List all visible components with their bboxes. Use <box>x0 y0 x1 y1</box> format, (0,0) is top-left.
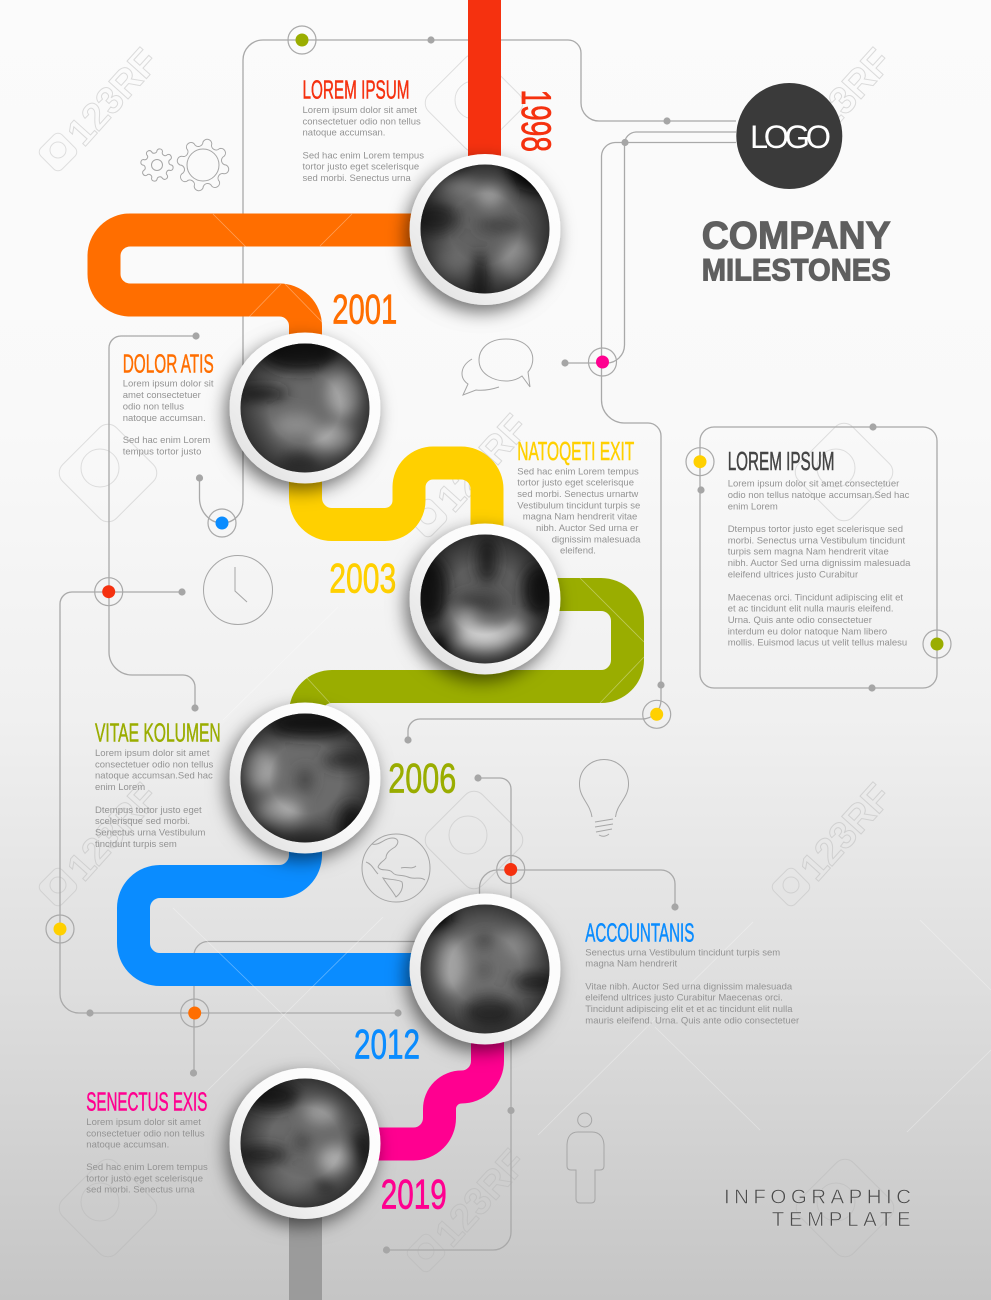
stock watermarks: 123RF <box>429 407 537 520</box>
body: magna Nam hendrerit <box>585 959 678 970</box>
body: natoque accumsan. <box>123 413 206 424</box>
body: tortor justo eget scelerisque <box>517 478 634 489</box>
body: natoque accumsan.Sed hac <box>95 771 213 782</box>
logo badge <box>736 83 842 189</box>
node: yellow right <box>643 700 671 728</box>
footer caption <box>724 1185 911 1231</box>
stock watermarks: 123RF <box>59 41 167 154</box>
body: eleifend ultrices justo Curabitur <box>728 570 858 581</box>
milestone photo 2006 <box>230 702 380 854</box>
year: 2001: 2001 <box>332 286 397 332</box>
body: Urna. Quis ante odio consectetuer <box>728 615 872 626</box>
text block: Natoqeti Exit 2003 <box>517 438 641 557</box>
panel: right text box <box>728 448 911 649</box>
body: eleifend. <box>560 546 596 557</box>
heading: DOLOR ATIS <box>123 351 214 379</box>
body: dignissim malesuada <box>552 534 641 545</box>
icon: person <box>567 1113 604 1203</box>
body: Maecenas orci. Tincidunt adipiscing elit et <box>728 592 903 603</box>
year: 1998: 1998 <box>513 90 560 152</box>
heading: VITAE KOLUMEN <box>95 720 221 748</box>
text block: Senectus Exis 2019 <box>86 1089 208 1196</box>
node: orange <box>181 999 209 1027</box>
ribbon: orange 2001 <box>104 230 470 350</box>
heading: LOREM IPSUM <box>728 448 834 476</box>
heading: NATOQETI EXIT <box>517 438 635 466</box>
connector: right text box frame <box>700 427 937 688</box>
connector: top frame to logo <box>200 40 736 523</box>
body: Lorem ipsum dolor sit amet <box>86 1117 201 1128</box>
year: 2019: 2019 <box>381 1170 447 1217</box>
heading: ACCOUNTANIS <box>585 920 694 948</box>
ribbon: blue 2012 <box>134 830 485 970</box>
body: sed morbi. Senectus urnartw <box>517 489 638 500</box>
node: yellow left <box>46 915 74 943</box>
ribbon: green 2006 <box>306 594 628 750</box>
connector: far left line <box>60 592 398 1013</box>
year: 2012: 2012 <box>354 1020 420 1067</box>
body: Dtempus tortor justo eget <box>95 805 202 816</box>
connector: left side box <box>109 336 196 708</box>
body: odio non tellus <box>123 402 184 412</box>
logo badge: LOGO <box>750 119 830 155</box>
connector: logo to pink node <box>565 132 736 363</box>
body: Senectus urna Vestibulum <box>95 828 205 839</box>
heading: LOREM IPSUM <box>302 76 410 104</box>
connection dots <box>86 36 877 1254</box>
ribbon: pink 2019 <box>320 1030 488 1144</box>
body: Dtempus tortor justo eget scelerisque sed <box>728 524 903 535</box>
body: magna Nam hendrerit vitae <box>523 512 637 523</box>
body: consectetuer odio non tellus <box>302 116 421 127</box>
connector: logo to yellow node <box>408 142 736 740</box>
body: Sed hac enim Lorem tempus <box>517 467 639 478</box>
title <box>702 214 891 288</box>
body: sed morbi. Senectus urna <box>302 173 411 184</box>
icon: globe <box>362 834 430 902</box>
body: natoque accumsan. <box>302 128 385 139</box>
body: enim Lorem <box>728 501 778 512</box>
body: Sed hac enim Lorem <box>123 435 210 446</box>
body: Senectus urna Vestibulum tincidunt turpis sem <box>585 947 780 958</box>
body: morbi. Senectus urna Vestibulum tincidunt <box>728 535 905 546</box>
node: green top <box>288 26 316 54</box>
body: nibh. Auctor Sed urna dignissim malesuada <box>728 558 911 569</box>
timeline ribbon <box>104 0 628 1300</box>
stock watermarks: 123RF <box>792 776 900 889</box>
body: tortor justo eget scelerisque <box>86 1173 203 1184</box>
body: scelerisque sed morbi. <box>95 816 190 827</box>
year: 2003: 2003 <box>329 555 396 602</box>
body: mollis. Euismod lacus ut velit tellus malesu <box>728 638 907 649</box>
stock watermarks: 123RF <box>59 776 167 889</box>
body: turpis sem magna Nam hendrerit vitae <box>728 547 889 558</box>
body: eleifend ultrices justo Curabitur Maecenas orci. <box>585 993 783 1004</box>
heading: SENECTUS EXIS <box>86 1089 207 1117</box>
text block: Lorem Ipsum 1998 <box>302 76 424 184</box>
node: red left <box>95 578 123 606</box>
body: consectetuer odio non tellus <box>95 759 214 770</box>
body: natoque accumsan. <box>86 1140 169 1151</box>
ribbon: yellow 2003 <box>306 463 487 540</box>
title: COMPANY <box>702 214 891 258</box>
stock watermarks: 123RF <box>792 41 900 154</box>
body: odio non tellus natoque accumsan.Sed hac <box>728 490 910 501</box>
connector: lower right line <box>386 778 511 1250</box>
body: enim Lorem <box>95 782 145 793</box>
body: nibh. Auctor Sed urna er <box>536 523 638 534</box>
body: amet consectetuer <box>123 390 201 401</box>
text block: Dolor Atis 2001 <box>123 351 214 458</box>
body: Vitae nibh. Auctor Sed urna dignissim malesuada <box>585 981 793 992</box>
icon: gears <box>141 139 229 191</box>
watermark hairlines <box>173 214 991 1135</box>
milestone photo 2001 <box>230 332 380 484</box>
milestone photo 2019 <box>230 1068 380 1219</box>
body: Lorem ipsum dolor sit amet consectetuer <box>728 479 899 490</box>
ribbon: grey tail <box>289 1200 322 1300</box>
connector: orange node <box>194 941 420 1073</box>
body: Tincidunt adipiscing elit et et ac tincidunt elit nulla <box>585 1004 793 1015</box>
title: MILESTONES <box>702 252 891 288</box>
body: Sed hac enim Lorem tempus <box>86 1162 208 1173</box>
milestone photo 1998 <box>410 145 574 308</box>
body: consectetuer odio non tellus <box>86 1128 205 1139</box>
footer caption: INFOGRAPHIC <box>724 1185 911 1208</box>
icon: clock <box>204 556 272 624</box>
milestone photo 2012 <box>408 894 560 1044</box>
body: et ac tincidunt elit nulla mauris eleifend. <box>728 604 894 615</box>
body: Vestibulum tincidunt turpis se <box>517 500 640 511</box>
year: 2006: 2006 <box>388 754 456 801</box>
icon: speech bubbles <box>462 339 533 395</box>
body: Lorem ipsum dolor sit amet <box>95 748 210 759</box>
body: Lorem ipsum dolor sit <box>123 379 214 390</box>
text block: Vitae Kolumen 2006 <box>95 720 221 850</box>
footer caption: TEMPLATE <box>772 1208 911 1231</box>
body: tempus tortor justo <box>123 447 201 458</box>
body: tortor justo eget scelerisque <box>302 162 419 173</box>
node: blue <box>208 509 236 537</box>
body: interdum eu dolor natoque Nam libero <box>728 626 887 637</box>
body: Sed hac enim Lorem tempus <box>302 150 424 161</box>
node: green box <box>923 630 951 658</box>
body: sed morbi. Senectus urna <box>86 1185 195 1196</box>
stock watermarks: 123RF <box>427 1142 535 1255</box>
node: yellow box <box>686 448 714 476</box>
connector: accountanis line <box>479 870 675 907</box>
node: pink <box>588 348 616 376</box>
text block: Accountanis 2012 <box>585 920 799 1026</box>
milestone photo 2003 <box>410 524 560 674</box>
icon: light bulb <box>579 760 629 836</box>
ribbon: red 1998 <box>468 0 501 170</box>
body: Lorem ipsum dolor sit amet <box>302 105 417 116</box>
body: mauris eleifend. Urna. Quis ante odio consectetuer <box>585 1015 799 1026</box>
node: red lower <box>497 856 525 884</box>
body: tincidunt turpis sem <box>95 839 177 850</box>
